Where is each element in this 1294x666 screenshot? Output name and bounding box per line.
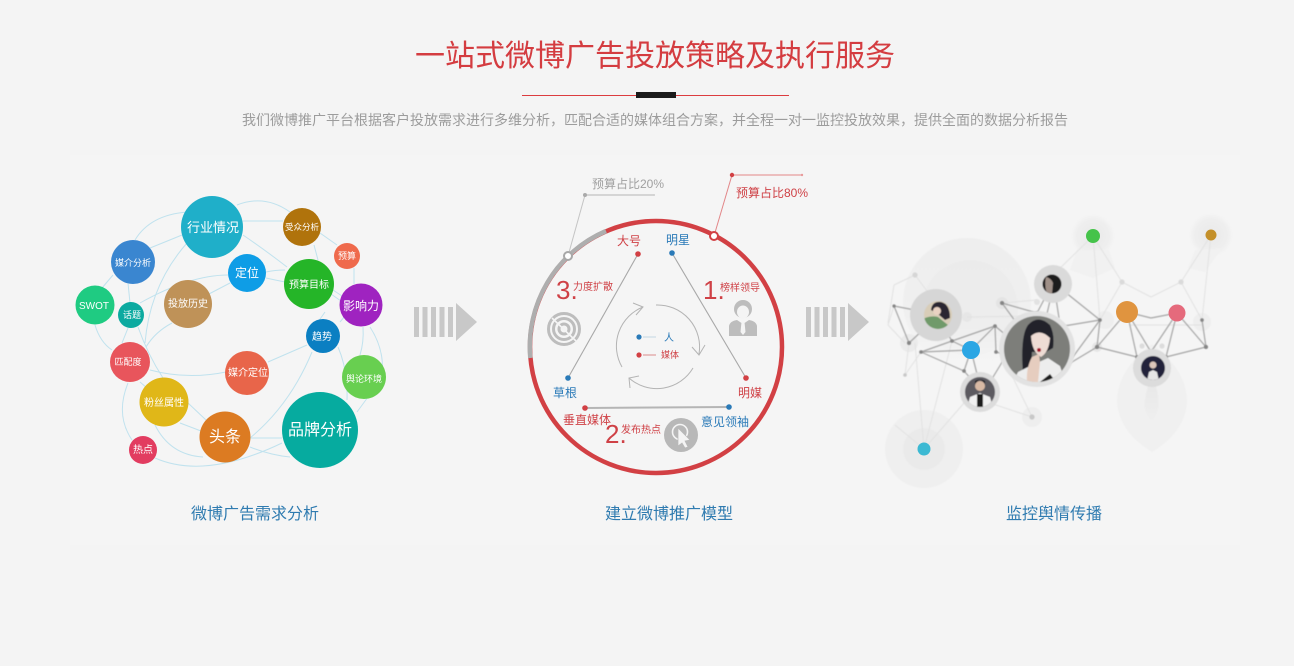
cycle arrows — [616, 303, 705, 389]
bubble: 匹配度 — [110, 342, 150, 382]
step 2 label — [605, 419, 661, 449]
arrow: step one to two — [414, 303, 477, 341]
step 3 label — [556, 275, 613, 305]
bubble: 投放历史 — [164, 280, 212, 328]
network nodes — [892, 272, 1208, 420]
bubble: SWOT: SWOT — [79, 301, 109, 312]
bubble: 预算目标: 预算目标 — [289, 278, 329, 291]
caption: 建立微博推广模型: 建立微博推广模型 — [605, 505, 733, 523]
arrow: step two to three — [806, 303, 869, 341]
avatar: man in white jacket — [960, 372, 1000, 412]
avatar: large woman — [999, 311, 1075, 387]
caption: 微博广告需求分析: 微博广告需求分析 — [191, 505, 319, 523]
legend: people and media — [636, 332, 679, 360]
strong network edges — [894, 288, 1206, 382]
content backdrop — [70, 155, 1240, 545]
bubble: 影响力 — [340, 284, 382, 326]
bubble: 品牌分析: 品牌分析 — [288, 421, 352, 439]
model ring — [530, 221, 782, 473]
bubble: 品牌分析 — [282, 392, 358, 468]
callout: 预算占比80% — [710, 173, 808, 240]
step 1 label — [703, 275, 760, 305]
bubble: 舆论环境: 舆论环境 — [346, 373, 382, 384]
step 2 label: 2. — [605, 419, 627, 449]
node labels: 垂直媒体 — [563, 413, 611, 427]
bubble: 媒介定位 — [225, 351, 269, 395]
colored node: gold — [1206, 230, 1216, 240]
bubble: 行业情况: 行业情况 — [187, 220, 239, 235]
bubble: 定位 — [228, 254, 266, 292]
subtitle: 我们微博推广平台根据客户投放需求进行多维分析，匹配合适的媒体组合方案，并全程一对一监控投放效果，提供全面的数据分析报告 — [242, 112, 1068, 128]
bubble: 行业情况 — [181, 196, 243, 258]
node labels — [553, 233, 762, 429]
colored node: teal — [918, 442, 930, 456]
bubble: 趋势 — [306, 319, 340, 353]
title: 一站式微博广告投放策略及执行服务 — [415, 40, 895, 73]
bubble: 头条 — [200, 412, 250, 462]
bubble: 媒介定位: 媒介定位 — [228, 366, 268, 379]
panel: promotion model — [530, 173, 808, 523]
callout: 预算占比80%: 预算占比80% — [736, 185, 808, 200]
bubble: SWOT — [76, 286, 114, 324]
bubble: 头条: 头条 — [209, 428, 241, 446]
step 1 label: 1. — [703, 275, 725, 305]
avatar: top portrait — [1034, 265, 1072, 303]
title divider — [522, 92, 789, 98]
triangle lines — [568, 253, 746, 408]
bubble: 预算: 预算 — [338, 250, 356, 261]
bubble connections — [95, 201, 382, 466]
bubble: 受众分析: 受众分析 — [285, 222, 319, 232]
caption: 监控舆情传播: 监控舆情传播 — [1006, 505, 1102, 523]
bubble: 媒介分析 — [111, 240, 155, 284]
bubble: 热点: 热点 — [133, 443, 153, 456]
bubble: 话题: 话题 — [123, 309, 141, 320]
node labels: 意见领袖 — [701, 414, 749, 429]
node labels: 明星 — [666, 233, 690, 247]
bubble: 预算 — [334, 243, 360, 269]
colored node: blue — [962, 341, 980, 359]
background halos — [885, 213, 1233, 488]
legend: people and media: 媒体 — [661, 349, 679, 360]
icon: person — [729, 300, 757, 336]
node labels: 草根 — [553, 386, 577, 400]
icon: radar — [548, 314, 580, 344]
bubble: 粉丝属性: 粉丝属性 — [144, 396, 184, 409]
step 2 label: 发布热点 — [621, 423, 661, 436]
avatar: right woman — [1133, 349, 1171, 387]
bubble: 粉丝属性 — [140, 378, 188, 426]
avatar: woman in green — [910, 289, 962, 341]
bubble: 话题 — [118, 302, 144, 328]
icon: cursor — [664, 418, 698, 452]
panel: bubble analysis — [76, 196, 386, 523]
legend: people and media: 人 — [664, 332, 674, 344]
colored node: green — [1086, 229, 1100, 243]
node labels: 大号 — [617, 234, 641, 248]
step 1 label: 榜样领导 — [720, 281, 760, 294]
step 3 label: 3. — [556, 275, 578, 305]
bubble: 影响力: 影响力 — [343, 298, 379, 313]
bubble: 舆论环境 — [342, 355, 386, 399]
callout: 预算占比20% — [564, 176, 664, 260]
colored node: orange — [1116, 301, 1138, 323]
bubble: 投放历史: 投放历史 — [168, 297, 208, 310]
bubble: 趋势: 趋势 — [312, 330, 332, 343]
bubble: 定位: 定位 — [235, 265, 259, 280]
triangle dots — [565, 250, 749, 411]
bubble: 预算目标 — [284, 259, 334, 309]
step 3 label: 力度扩散 — [573, 280, 613, 293]
bubble: 热点 — [129, 436, 157, 464]
bubble: 受众分析 — [283, 208, 321, 246]
panel: opinion monitoring network — [885, 213, 1233, 523]
node labels: 明媒 — [738, 386, 762, 400]
bubbles — [76, 196, 386, 468]
callout: 预算占比20%: 预算占比20% — [592, 176, 664, 191]
bubble: 匹配度: 匹配度 — [114, 356, 142, 367]
colored node: pink — [1168, 304, 1186, 322]
bubble: 媒介分析: 媒介分析 — [115, 257, 151, 268]
faint network edges — [888, 235, 1211, 449]
